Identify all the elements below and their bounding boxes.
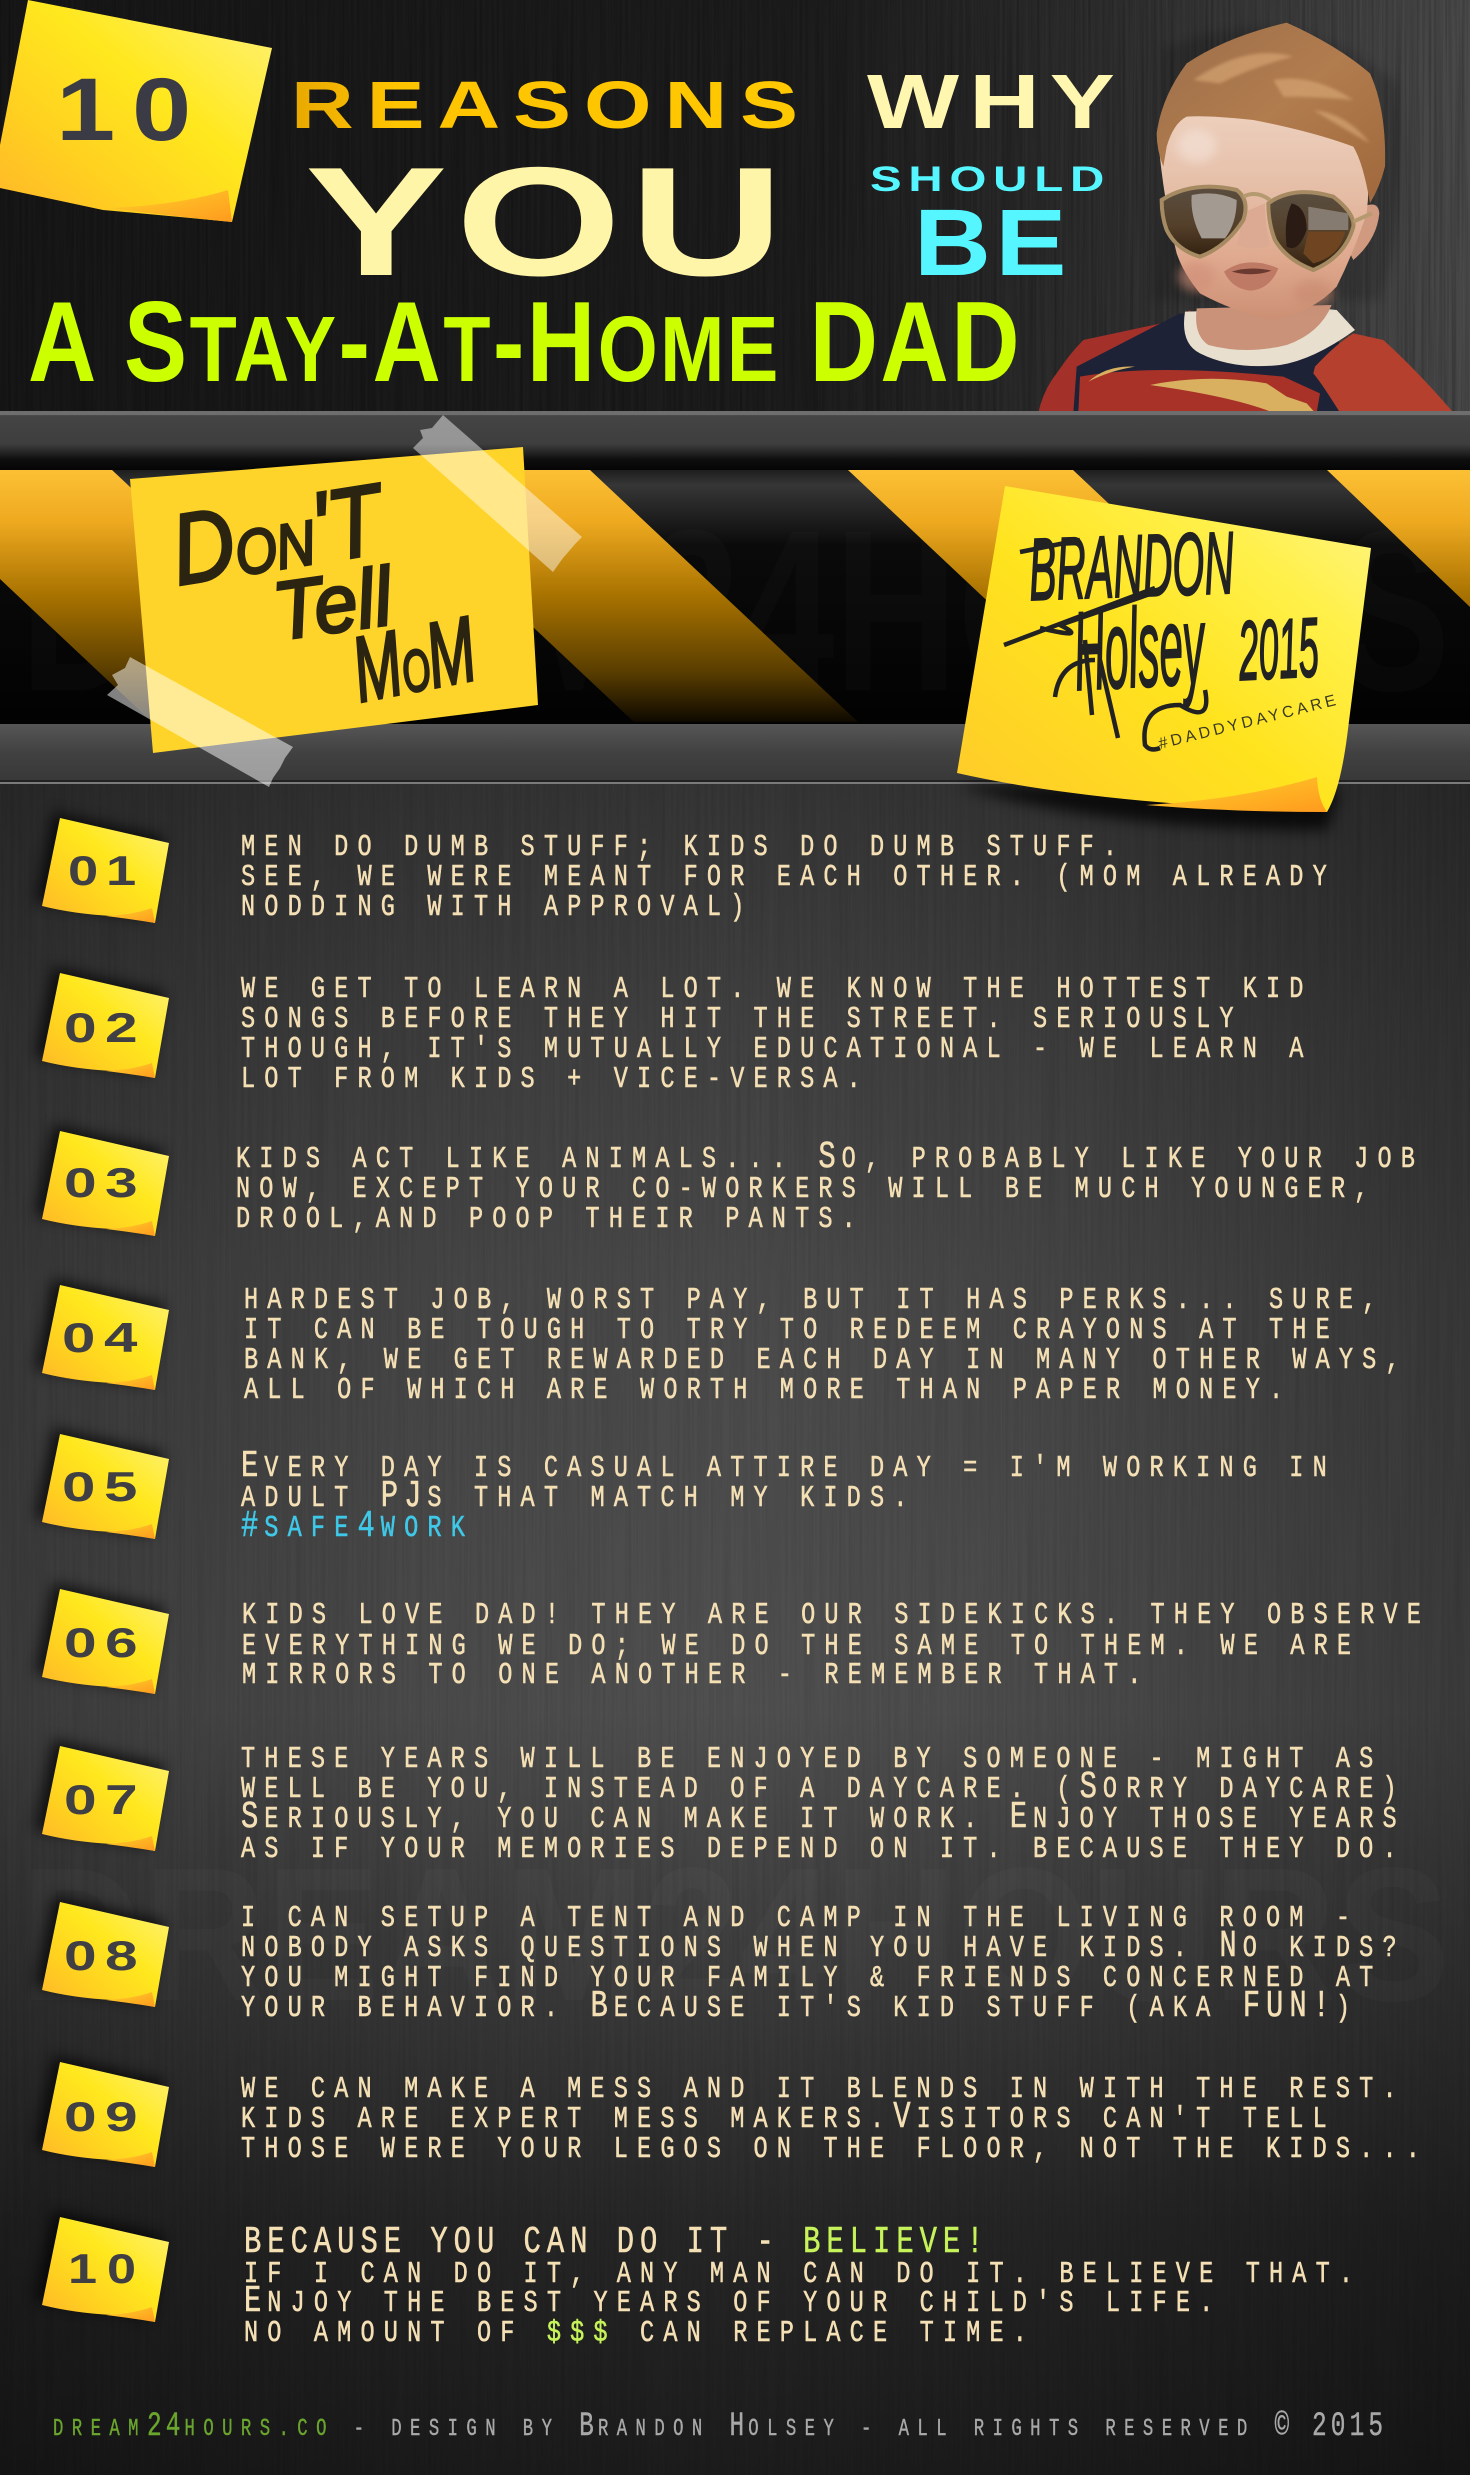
hashtag: #DADDYDAYCARE [1157,691,1341,753]
text 02: SONGS BEFORE THEY HIT THE STREET. SERIOUSLY [241,1002,1243,1037]
left cape [1038,310,1220,413]
reason 10 [35,2211,1385,2351]
title word: you: YOU [305,135,792,308]
icon: baby in sunglasses and superman shirt [1038,23,1453,413]
page curl [1146,777,1327,812]
nose [1237,203,1270,248]
heading number 10: 10 [56,59,208,159]
band dark background [0,470,1470,724]
text 01: MEN DO DUMB STUFF; KIDS DO DUMB STUFF. [241,830,1126,865]
text 10: IF I CAN DO IT, ANY MAN CAN DO IT. BELIEVE THAT. [244,2257,1362,2292]
badge 08 [35,1896,169,2007]
text 04: ALL OF WHICH ARE WORTH MORE THAN PAPER MONEY. [244,1373,1292,1408]
bottom tape [107,657,293,787]
hair [1157,23,1385,203]
title line: a stay-at-home dad: A STAY-AT-HOME DAD [28,279,1022,406]
badge 01: 01 [68,847,144,894]
badge 01 [35,812,169,923]
text 02: THOUGH, IT'S MUTUALLY EDUCATIONAL - WE LEARN A [241,1032,1313,1067]
diagonal stripes [0,470,1470,722]
reason 02 [35,967,1336,1097]
band top bar [0,412,1470,470]
badge 08: 08 [64,1932,146,1979]
text 03: KIDS ACT LIKE ANIMALS... SO, PROBABLY LIKE YOUR JOB [236,1137,1424,1179]
note paper [130,447,538,753]
text 04: IT CAN BE TOUGH TO TRY TO REDEEM CRAYONS AT THE [244,1313,1339,1348]
reason 01 [35,812,1359,925]
text 08: YOU MIGHT FIND YOUR FAMILY & FRIENDS CONCERNED AT [241,1961,1382,1996]
text 01: NODDING WITH APPROVAL) [241,890,754,925]
text 06: EVERYTHING WE DO; WE DO THE SAME TO THEM. WE ARE [242,1629,1360,1664]
text 10: BECAUSE YOU CAN DO IT - BELIEVE! [244,2222,990,2264]
ear [1340,204,1379,260]
text 02: WE GET TO LEARN A LOT. WE KNOW THE HOTTEST KID [241,972,1313,1007]
text 09: THOSE WERE YOUR LEGOS ON THE FLOOR, NOT THE KIDS... [241,2132,1429,2167]
text 09: WE CAN MAKE A MESS AND IT BLENDS IN WITH THE REST. [241,2072,1406,2107]
badge 05 [35,1428,169,1539]
text 02: LOT FROM KIDS + VICE-VERSA. [241,1062,870,1097]
badge 02 [35,967,169,1078]
badge 06: 06 [64,1619,146,1666]
text 03: DROOL,AND POOP THEIR PANTS. [236,1202,865,1237]
badge 10 [35,2211,169,2322]
torso [1073,313,1357,413]
sunglasses [1162,187,1372,270]
title word: should: SHOULD [870,160,1111,199]
badge 03: 03 [64,1159,146,1206]
hazard band [0,411,1470,784]
text 07: SERIOUSLY, YOU CAN MAKE IT WORK. ENJOY THOSE YEARS [241,1797,1406,1839]
badge 03 [35,1125,169,1236]
neck [1196,305,1332,350]
reason 07 [35,1740,1429,1867]
badge 06 [35,1583,169,1694]
chest [1078,370,1320,413]
footer credit line: DREAM24HOURS.CO - DESIGN BY BRANDON HOLSEY - ALL RIGHTS RESERVED © 2015 [53,2406,1387,2445]
reason 03 [35,1125,1447,1237]
text 04: HARDEST JOB, WORST PAY, BUT IT HAS PERKS... SURE, [244,1283,1385,1318]
text 06: KIDS LOVE DAD! THEY ARE OUR SIDEKICKS. THEY OBSERVE [242,1598,1430,1633]
badge 02: 02 [64,1004,146,1051]
handwriting: DON'T [164,462,394,607]
reason 05 [35,1428,1359,1548]
text 05: ADULT PJS THAT MATCH MY KIDS. [241,1476,917,1518]
face [1158,76,1368,320]
mouth [1224,262,1278,291]
signature name [1004,513,1321,749]
reason 06 [35,1583,1453,1694]
right cape [1313,333,1453,413]
sticky note: don't tell mom [107,415,582,787]
reason 04 [35,1279,1432,1408]
top tape [413,415,582,572]
handwriting [164,462,484,722]
badge 07 [35,1740,169,1851]
band bottom bar [0,724,1470,782]
sticky note: signature: 2015 [1236,600,1321,698]
text 05: #SAFE4WORK [241,1506,474,1548]
badge 07: 07 [64,1776,146,1823]
text 08: YOUR BEHAVIOR. BECAUSE IT'S KID STUFF (AKA FUN!) [241,1986,1359,2028]
text 10: NO AMOUNT OF $$$ CAN REPLACE TIME. [244,2316,1036,2351]
reason 08 [35,1896,1429,2028]
text 07: THESE YEARS WILL BE ENJOYED BY SOMEONE - MIGHT AS [241,1742,1382,1777]
signature name: BRANDON [1027,513,1236,619]
reason 09 [35,2056,1429,2167]
text 09: KIDS ARE EXPERT MESS MAKERS.VISITORS CAN'T TELL [241,2097,1336,2139]
text 05: EVERY DAY IS CASUAL ATTIRE DAY = I'M WORKING IN [241,1446,1336,1488]
collar [1184,308,1355,366]
handwriting: Tell [268,551,400,658]
text 03: NOW, EXCEPT YOUR CO-WORKERS WILL BE MUCH YOUNGER, [236,1172,1377,1207]
title: 10 reasons why you should be a stay-at-home dad [28,59,1125,406]
text 04: BANK, WE GET REWARDED EACH DAY IN MANY OTHER WAYS, [244,1343,1409,1378]
header background [0,0,1470,412]
text 06: MIRRORS TO ONE ANOTHER - REMEMBER THAT. [242,1658,1151,1693]
badge 04: 04 [62,1314,146,1361]
badge 05: 05 [62,1463,146,1510]
text 07: AS IF YOUR MEMORIES DEPEND ON IT. BECAUSE THEY DO. [241,1832,1406,1867]
text 10: ENJOY THE BEST YEARS OF YOUR CHILD'S LIFE. [244,2281,1222,2323]
title word: be: BE [914,190,1071,296]
shield [1150,379,1315,413]
badge 09 [35,2056,169,2167]
title word: why: WHY [867,59,1125,145]
badge 09: 09 [64,2093,146,2140]
text 07: WELL BE YOU, INSTEAD OF A DAYCARE. (SORRY DAYCARE) [241,1767,1406,1809]
signature name: Holsey [1071,582,1209,714]
handwriting: MOM [344,598,484,722]
icon: big sticky note with 10 [0,0,272,222]
sticky note: signature [957,486,1371,830]
text 08: I CAN SETUP A TENT AND CAMP IN THE LIVING ROOM - [241,1901,1359,1936]
text 08: NOBODY ASKS QUESTIONS WHEN YOU HAVE KIDS. NO KIDS? [241,1926,1406,1968]
badge 04 [35,1279,169,1390]
text 01: SEE, WE WERE MEANT FOR EACH OTHER. (MOM ALREADY [241,860,1336,895]
note paper [957,486,1371,812]
badge 10: 10 [68,2245,146,2292]
title word: reasons: REASONS [291,68,811,143]
